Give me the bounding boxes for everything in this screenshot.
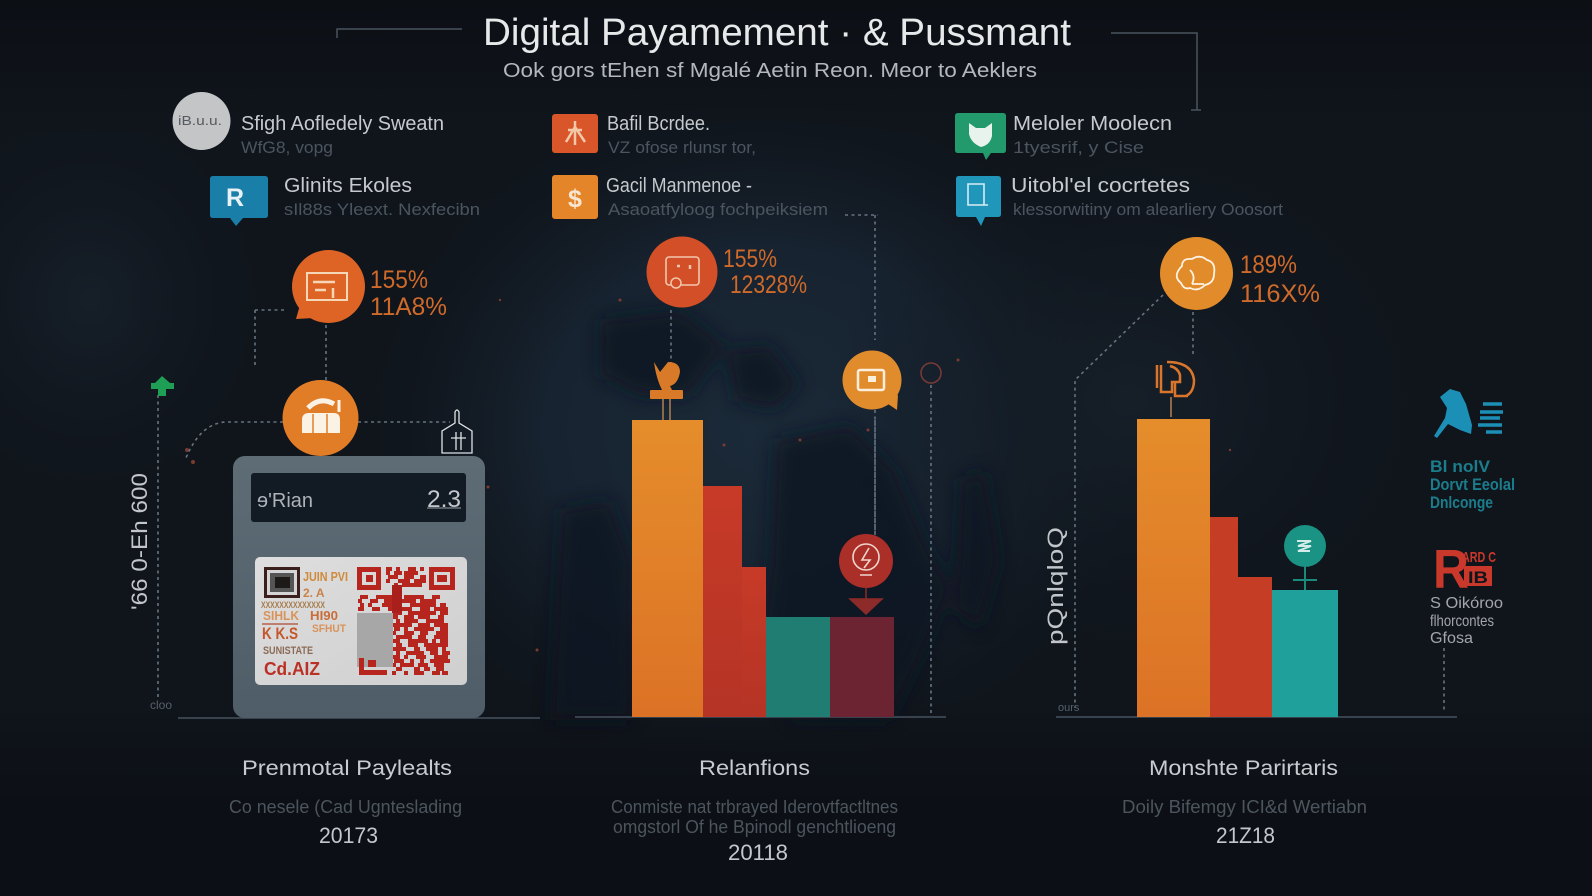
side note: blue figure: Dnlconge	[1430, 493, 1493, 512]
right caption: 21Z18	[1216, 823, 1275, 848]
legend item: Glinits Ekoles: R	[226, 184, 244, 212]
percent figures right: 189%	[1240, 251, 1297, 279]
legend item: Uitobl'el cocrtetes	[956, 175, 1283, 226]
card text: SFHUT	[312, 623, 346, 635]
percent figures left: 155%	[370, 266, 428, 294]
legend item: Sfigh Aofledely Sweatn: iB.u.u.	[178, 113, 222, 128]
side note: red logo: IB	[1468, 568, 1488, 587]
percent figures middle	[723, 245, 807, 299]
icon: orange cloud circle	[1160, 237, 1233, 310]
side note: red logo	[1430, 538, 1503, 647]
legend item: Sfigh Aofledely Sweatn	[172, 92, 444, 157]
right caption: Doily Bifemgy ICI&d Wertiabn	[1122, 797, 1367, 817]
card text: 2. A	[303, 586, 325, 600]
panel: middle chart	[575, 236, 946, 865]
right guides	[1075, 295, 1444, 712]
percent figures middle: 155%	[723, 245, 777, 273]
left vertical guide	[158, 310, 450, 698]
legend item: Gacil Manmenoe	[552, 175, 828, 219]
icon: red circle with arrow	[839, 534, 893, 614]
panel: left chart	[127, 250, 540, 848]
icon: teal circle on bar	[1284, 525, 1326, 590]
legend item: Bafil Brdee: Bafil Bcrdee.	[607, 113, 710, 135]
icon: outlined tag	[442, 410, 472, 453]
small axis tick label: cloo	[150, 698, 172, 712]
device display bar	[251, 473, 466, 522]
side note: red logo: ARD C	[1462, 549, 1496, 566]
icon: orange laptop bubble	[842, 350, 902, 410]
legend item: Bafil Brdee: VZ ofose rlunsr tor,	[608, 138, 756, 157]
middle caption	[611, 757, 898, 865]
icon: blue figure	[1434, 389, 1472, 438]
rotated axis label right: pQnlqloQ	[1043, 527, 1068, 645]
percent figures left: 11A8%	[370, 293, 447, 321]
title: Digital Payamement · & Pussmant	[483, 12, 1071, 54]
card text: HI90	[310, 608, 338, 623]
subtitle: Ook gors tEhen sf Mgalé Aetin Reon. Meor to Aeklers	[503, 60, 1037, 82]
legend item: Uitobl'el cocrtetes: klessorwitiny om alearliery Ooosort	[1013, 200, 1283, 219]
left caption: Prenmotal Paylealts	[242, 757, 452, 780]
icon: orange line glyph on bar	[1157, 362, 1194, 417]
small tick label right: ours	[1058, 702, 1080, 714]
side note: red logo: Gfosa	[1430, 630, 1473, 647]
left caption: Co nesele (Cad Ugnteslading	[229, 797, 462, 817]
panel: right chart	[1043, 237, 1457, 848]
side note: blue figure	[1430, 389, 1515, 512]
card text: XXXXXXXXXXXXXX	[261, 600, 325, 610]
side note: blue figure: Bl nolV	[1430, 457, 1491, 476]
card text: Cd.AIZ	[264, 659, 320, 679]
icon: orange circle with wallet	[282, 380, 358, 456]
legend item: Meloler Moolecn	[955, 113, 1172, 160]
middle caption: omgstorl Of he Bpinodl genchtlioeng	[613, 817, 896, 837]
side note: red logo: flhorcontes	[1430, 613, 1494, 630]
legend item: Gacil Manmenoe: Gacil Manmenoe -	[606, 175, 752, 197]
legend item: Sfigh Aofledely Sweatn: Sfigh Aofledely Sweatn	[241, 113, 444, 135]
legend item: Meloler Moolecn: Meloler Moolecn	[1013, 113, 1172, 135]
title bracket right	[1111, 33, 1201, 110]
card text: JUIN PVI	[303, 569, 348, 584]
side note: blue figure: Dorvt Eeolal	[1430, 475, 1515, 494]
percent figures middle: 12328%	[730, 271, 807, 299]
card text: SIHLK	[263, 608, 300, 623]
middle caption: 20118	[728, 840, 788, 865]
card text: SUNISTATE	[263, 645, 313, 657]
percent figures left	[370, 266, 447, 321]
left caption: 20173	[319, 823, 378, 848]
percent figures right	[1240, 251, 1320, 308]
legend item: Gacil Manmenoe: $	[568, 185, 582, 213]
legend item: Glinits Ekoles: sIl88s Yleext. Nexfecibn	[284, 200, 480, 219]
icon: green arrow	[151, 376, 174, 396]
middle guides	[671, 310, 931, 715]
middle axis line	[575, 716, 946, 718]
right caption: Monshte Parirtaris	[1149, 757, 1338, 780]
middle caption: Conmiste nat trbrayed Iderovtfactltnes	[611, 797, 898, 817]
middle caption: Relanfions	[699, 757, 810, 780]
device panel	[233, 456, 485, 718]
icon: red ring	[921, 363, 941, 383]
connector between legend squares and chart	[845, 215, 878, 535]
side note: red logo: S Oikóroo	[1430, 595, 1503, 612]
card text	[261, 569, 348, 679]
legend item: Glinits Ekoles	[210, 175, 480, 226]
QR code	[357, 567, 455, 675]
side note: red logo: R	[1433, 538, 1469, 600]
icon: red-orange face bubble	[646, 236, 718, 308]
card text: K K.S	[262, 624, 298, 643]
legend item: Sfigh Aofledely Sweatn: WfG8, vopg	[241, 138, 333, 157]
legend item: Uitobl'el cocrtetes: Uitobl'el cocrtetes	[1011, 175, 1190, 197]
left axis line	[178, 717, 540, 719]
right caption	[1122, 757, 1367, 848]
percent figures right: 116X%	[1240, 280, 1320, 308]
legend item: Gacil Manmenoe: Asaoatfyloog fochpeiksiem	[608, 200, 828, 219]
QR payment card	[255, 557, 467, 685]
legend item: Bafil Brdee	[552, 113, 756, 157]
left caption	[229, 757, 462, 848]
rotated axis label left: '66 0-Eh 600	[127, 473, 152, 610]
legend item: Meloler Moolecn: 1tyesrif, y Cise	[1013, 138, 1144, 157]
middle bar chart	[632, 420, 894, 717]
device display bar: 2.3	[427, 486, 461, 513]
icon: speech bubble orange-red	[292, 250, 365, 323]
right bar chart	[1137, 419, 1338, 717]
device display bar: ɘ'Rian	[257, 490, 313, 512]
right axis line	[1056, 716, 1457, 718]
icon: orange hand on stand	[650, 362, 683, 420]
legend item: Glinits Ekoles: Glinits Ekoles	[284, 175, 412, 197]
title bracket left	[337, 29, 462, 38]
card chip icon	[264, 567, 300, 598]
